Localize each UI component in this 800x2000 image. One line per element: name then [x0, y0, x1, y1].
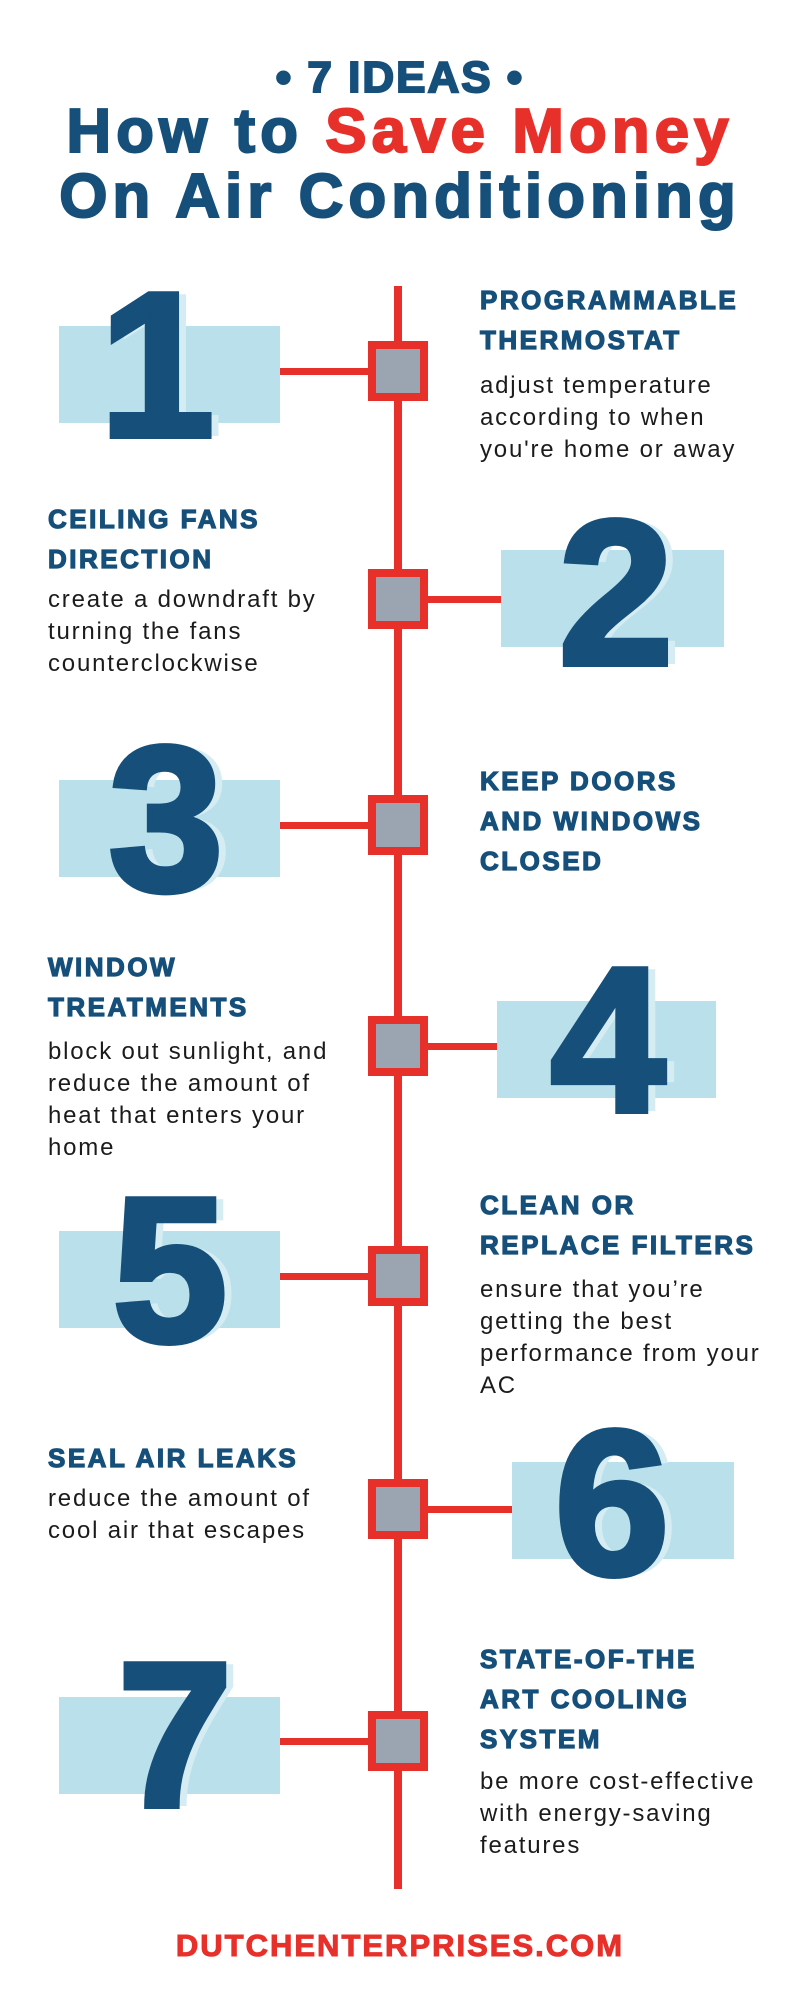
number 4: 4: [551, 925, 665, 1155]
heading 7: ART COOLING: [480, 1684, 690, 1714]
heading 1: PROGRAMMABLE: [480, 285, 738, 315]
connector 5: [280, 1273, 370, 1280]
heading 7: STATE-OF-THE: [480, 1644, 697, 1674]
body 5: AC: [480, 1372, 517, 1399]
rect 1: [59, 326, 280, 423]
number 1: 1: [100, 250, 214, 480]
rect 4: [497, 1001, 716, 1098]
body 7: with energy-saving: [480, 1800, 712, 1827]
body 2: create a downdraft by: [48, 586, 317, 613]
body 2: [48, 586, 317, 677]
rect 5: [59, 1231, 280, 1328]
connector 7: [280, 1738, 370, 1745]
item 3: [59, 704, 702, 934]
body 7: features: [480, 1832, 581, 1859]
heading 3: KEEP DOORS: [480, 766, 678, 796]
rect 3: [59, 780, 280, 877]
item 1: [59, 250, 738, 480]
heading 3: AND WINDOWS: [480, 806, 702, 836]
marker 1: [368, 341, 428, 401]
marker 6: [368, 1479, 428, 1539]
body 7: be more cost-effective: [480, 1768, 755, 1795]
item 4: [47, 925, 716, 1161]
body 7: [480, 1768, 755, 1859]
body 5: getting the best: [480, 1308, 673, 1335]
body 6: [48, 1485, 311, 1544]
connector 2: [428, 596, 501, 603]
heading 2: DIRECTION: [48, 544, 214, 574]
body 4: [48, 1038, 328, 1161]
heading 1: THERMOSTAT: [480, 325, 682, 355]
rect 7: [59, 1697, 280, 1794]
body 4: home: [48, 1134, 115, 1161]
heading 4: WINDOW: [48, 952, 177, 982]
body 4: reduce the amount of: [48, 1070, 311, 1097]
heading 1: [480, 285, 738, 355]
item 6: [48, 1388, 734, 1618]
connector 4: [428, 1043, 497, 1050]
body 5: ensure that you’re: [480, 1276, 705, 1303]
heading 5: REPLACE FILTERS: [480, 1230, 755, 1260]
number 2: 2: [559, 478, 673, 708]
body 5: performance from your: [480, 1340, 761, 1367]
marker 5: [368, 1246, 428, 1306]
heading 3: CLOSED: [480, 846, 603, 876]
connector 3: [280, 822, 370, 829]
heading 7: SYSTEM: [480, 1724, 602, 1754]
item 5: [59, 1155, 761, 1399]
title line 1: How to Save Money: [66, 97, 734, 166]
body 1: adjust temperature: [480, 372, 713, 399]
heading 4: TREATMENTS: [48, 992, 249, 1022]
body 1: according to when: [480, 404, 705, 431]
body 2: turning the fans: [48, 618, 242, 645]
body 5: [480, 1276, 761, 1399]
marker 7: [368, 1711, 428, 1771]
connector 6: [428, 1506, 512, 1513]
rect 2: [501, 550, 724, 647]
body 6: cool air that escapes: [48, 1517, 306, 1544]
heading 2: CEILING FANS: [48, 504, 260, 534]
item 2: [48, 478, 724, 708]
body 6: reduce the amount of: [48, 1485, 311, 1512]
timeline vertical line: [394, 286, 402, 1889]
body 1: [480, 372, 736, 463]
heading 5: CLEAN OR: [480, 1190, 636, 1220]
marker 3: [368, 795, 428, 855]
marker 4: [368, 1016, 428, 1076]
footer: website: DUTCHENTERPRISES.COM: [176, 1928, 624, 1963]
number 7: 7: [118, 1620, 232, 1850]
heading 5: [480, 1190, 755, 1260]
title line 2: On Air Conditioning: [59, 162, 741, 231]
marker 2: [368, 569, 428, 629]
connector 1: [280, 368, 370, 375]
body 4: block out sunlight, and: [48, 1038, 328, 1065]
body 4: heat that enters your: [48, 1102, 306, 1129]
heading 3: [480, 766, 702, 876]
title: 7 ideas: • 7 IDEAS •: [276, 53, 524, 102]
heading 4: [47, 952, 249, 1022]
body 2: counterclockwise: [48, 650, 260, 677]
heading 7: [480, 1644, 697, 1754]
number 6: 6: [555, 1388, 669, 1618]
number 3: 3: [109, 704, 223, 934]
heading 6: SEAL AIR LEAKS: [48, 1443, 298, 1473]
heading 2: [48, 504, 260, 574]
rect 6: [512, 1462, 734, 1559]
item 7: [59, 1620, 755, 1859]
body 1: you're home or away: [480, 436, 736, 463]
number 5: 5: [113, 1155, 227, 1385]
